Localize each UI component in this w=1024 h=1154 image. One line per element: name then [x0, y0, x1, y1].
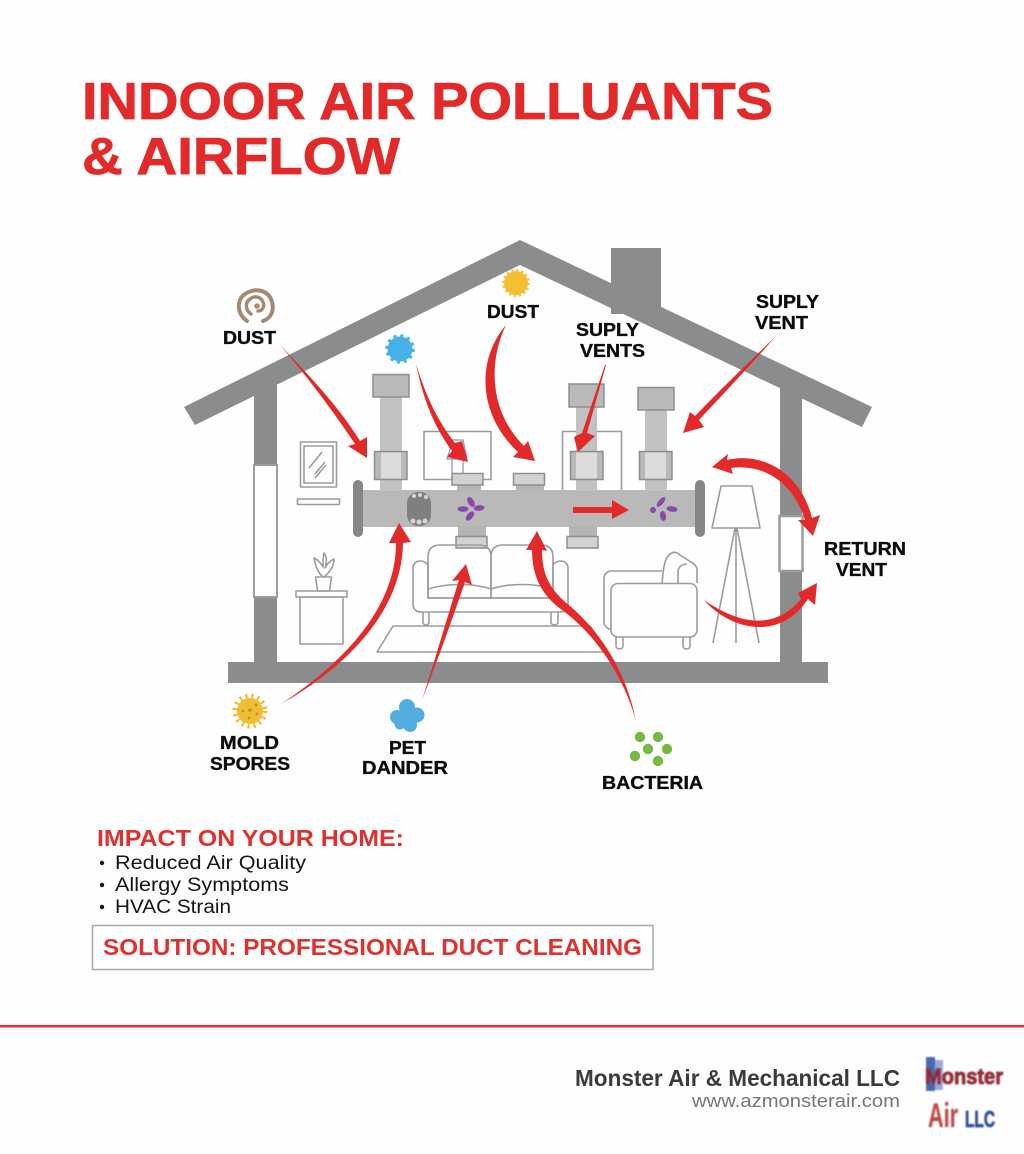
solution box: [92, 926, 653, 970]
arrow: duct airflow: [573, 500, 629, 519]
company name: Monster Air & Mechanical LLC: [575, 1065, 900, 1091]
vertical pipes: [380, 397, 667, 491]
label: pet dander: DANDER: [362, 758, 448, 778]
left window: [254, 465, 277, 597]
top vent caps: [373, 374, 409, 397]
label: supply vent: [755, 292, 819, 333]
title: INDOOR AIR POLLUANTS: [82, 73, 773, 131]
label: mold spores: SPORES: [210, 754, 290, 774]
solution box: SOLUTION: PROFESSIONAL DUCT CLEANING: [103, 934, 642, 960]
label: supply vents: [576, 320, 645, 361]
heading: impact on your home: IMPACT ON YOUR HOME:: [97, 825, 404, 851]
icon: blue particle: [387, 336, 413, 362]
arrow: return air upper: [712, 454, 820, 536]
impact list: [100, 853, 307, 918]
arrow: dust to duct: [280, 345, 367, 458]
side table with plant: [296, 553, 347, 644]
duct end caps: [353, 480, 363, 537]
icon: yellow dust: [504, 270, 528, 296]
rug: [377, 626, 608, 652]
label: mold spores: MOLD: [220, 733, 279, 753]
icon: mold spore: [235, 696, 265, 726]
label: supply vents: VENTS: [580, 341, 645, 361]
label: bacteria: BACTERIA: [602, 773, 703, 793]
small lamp behind vent: [447, 440, 467, 473]
label: return vent: VENT: [836, 560, 887, 580]
impact list: Allergy Symptoms: [115, 875, 289, 896]
label: dust left: DUST: [223, 328, 276, 348]
arrow: mold spores to duct: [281, 523, 411, 704]
impact list: Reduced Air Quality: [115, 853, 307, 874]
icon: bacteria: [630, 732, 672, 766]
right window: [780, 516, 802, 571]
label: return vent: RETURN: [824, 539, 906, 559]
wall mirror: [300, 442, 336, 487]
label: mold spores: [210, 733, 290, 774]
arrow: pet dander to sofa: [422, 564, 472, 700]
company logo: Monster: [925, 1064, 1003, 1089]
right wall: [780, 385, 802, 670]
arrow: blue particle to vent: [416, 364, 468, 462]
armchair: [604, 552, 697, 649]
label: return vent: [824, 539, 906, 580]
arrow: yellow dust to vent: [485, 325, 535, 461]
icon: dust swirl: [239, 290, 273, 321]
duct system: [353, 374, 705, 548]
company logo: Air: [928, 1097, 958, 1135]
house structure: [184, 240, 872, 683]
floor lamp: [712, 486, 760, 643]
website: www.azmonsterair.com: [691, 1090, 900, 1111]
floor: [228, 662, 828, 683]
arrow: supply vents: [574, 365, 606, 452]
title: [82, 73, 773, 186]
label: supply vent: SUPLY: [756, 292, 819, 312]
back wall picture frames: [424, 432, 622, 490]
icon: pet dander: [390, 699, 424, 732]
label: supply vent: VENT: [755, 313, 808, 333]
company logo: [925, 1057, 1003, 1135]
main duct: [360, 490, 696, 527]
label: dust center: DUST: [487, 302, 539, 322]
duct collars: [374, 452, 672, 480]
label: pet dander: PET: [389, 738, 426, 758]
roof: [184, 240, 872, 427]
arrow: bacteria to duct: [526, 531, 636, 721]
label: supply vents: SUPLY: [576, 320, 639, 340]
sofa: [413, 545, 568, 625]
arrow: return air lower: [704, 583, 817, 627]
small vent grilles: [452, 474, 483, 485]
dust clump in duct: [407, 492, 431, 526]
arrow: supply vent: [683, 337, 775, 433]
bacteria in duct left: [458, 496, 485, 522]
impact list: HVAC Strain: [115, 897, 231, 918]
duct stubs: [457, 484, 597, 537]
company logo: LLC: [965, 1106, 995, 1132]
wall shelf: [298, 499, 340, 504]
label: pet dander: [362, 738, 448, 778]
left wall: [254, 385, 277, 670]
bacteria in duct right: [650, 496, 678, 521]
title: & AIRFLOW: [82, 128, 401, 186]
chimney: [611, 248, 661, 314]
footer divider: [0, 1025, 1024, 1028]
